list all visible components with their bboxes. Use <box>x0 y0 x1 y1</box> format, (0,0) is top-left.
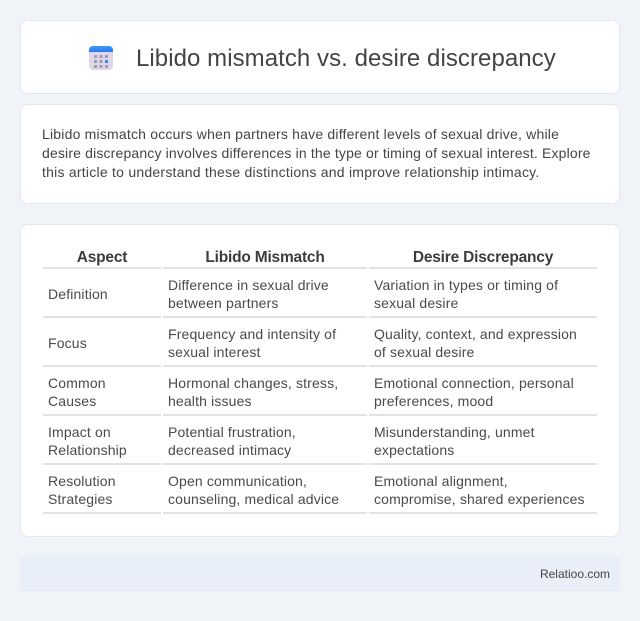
row: Focus <box>48 326 577 360</box>
row: Common Causes: Common <box>48 375 106 391</box>
row: Resolution Strategies: Open communication, <box>168 473 307 489</box>
column header: Aspect: Aspect <box>77 248 127 266</box>
title: Libido mismatch vs. desire discrepancy <box>136 45 556 72</box>
row: Impact on Relationship: Relationship <box>48 442 127 458</box>
row: Common Causes: Causes <box>48 393 96 409</box>
row: Resolution Strategies: counseling, medical advice <box>168 491 339 507</box>
row: Focus: of sexual desire <box>374 344 474 360</box>
comparison table <box>43 248 597 514</box>
row: Resolution Strategies: Resolution <box>48 473 116 489</box>
row: Definition: sexual desire <box>374 295 458 311</box>
row: Common Causes: Emotional connection, personal <box>374 375 574 391</box>
row: Common Causes: Hormonal changes, stress, <box>168 375 338 391</box>
footer bar <box>20 557 620 591</box>
row: Impact on Relationship: Potential frustration, <box>168 424 296 440</box>
row: Common Causes <box>48 375 574 409</box>
icon: calendar <box>89 46 113 70</box>
row: Resolution Strategies: Strategies <box>48 491 113 507</box>
row: Focus: Frequency and intensity of <box>168 326 336 342</box>
row: Impact on Relationship: decreased intimacy <box>168 442 291 458</box>
intro text: desire discrepancy involves differences in the type or timing of sexual interest. Explore <box>42 145 591 161</box>
row: Definition: Definition <box>48 286 108 302</box>
footer text: Relatioo.com <box>540 567 610 581</box>
row: Focus: Quality, context, and expression <box>374 326 577 342</box>
row: Resolution Strategies: Emotional alignment, <box>374 473 508 489</box>
row: Impact on Relationship: Misunderstanding, unmet <box>374 424 535 440</box>
row: Definition <box>48 277 558 311</box>
intro text: Libido mismatch occurs when partners have different levels of sexual drive, while <box>42 126 559 142</box>
row: Focus: sexual interest <box>168 344 261 360</box>
row: Definition: Variation in types or timing of <box>374 277 558 293</box>
intro text: this article to understand these distinctions and improve relationship intimacy. <box>42 164 540 180</box>
row: Definition: between partners <box>168 295 279 311</box>
intro panel <box>20 104 620 204</box>
table panel <box>20 224 620 537</box>
row: Resolution Strategies: compromise, shared experiences <box>374 491 585 507</box>
row: Impact on Relationship <box>48 424 535 458</box>
header panel <box>20 20 620 94</box>
row: Definition: Difference in sexual drive <box>168 277 329 293</box>
row: Impact on Relationship: expectations <box>374 442 454 458</box>
column header: Desire Discrepancy: Desire Discrepancy <box>413 248 553 266</box>
column header: Libido Mismatch: Libido Mismatch <box>205 248 325 266</box>
row: Common Causes: health issues <box>168 393 252 409</box>
row: Focus: Focus <box>48 335 87 351</box>
intro text <box>42 126 591 180</box>
row: Common Causes: preferences, mood <box>374 393 493 409</box>
row: Impact on Relationship: Impact on <box>48 424 111 440</box>
row: Resolution Strategies <box>48 473 585 507</box>
